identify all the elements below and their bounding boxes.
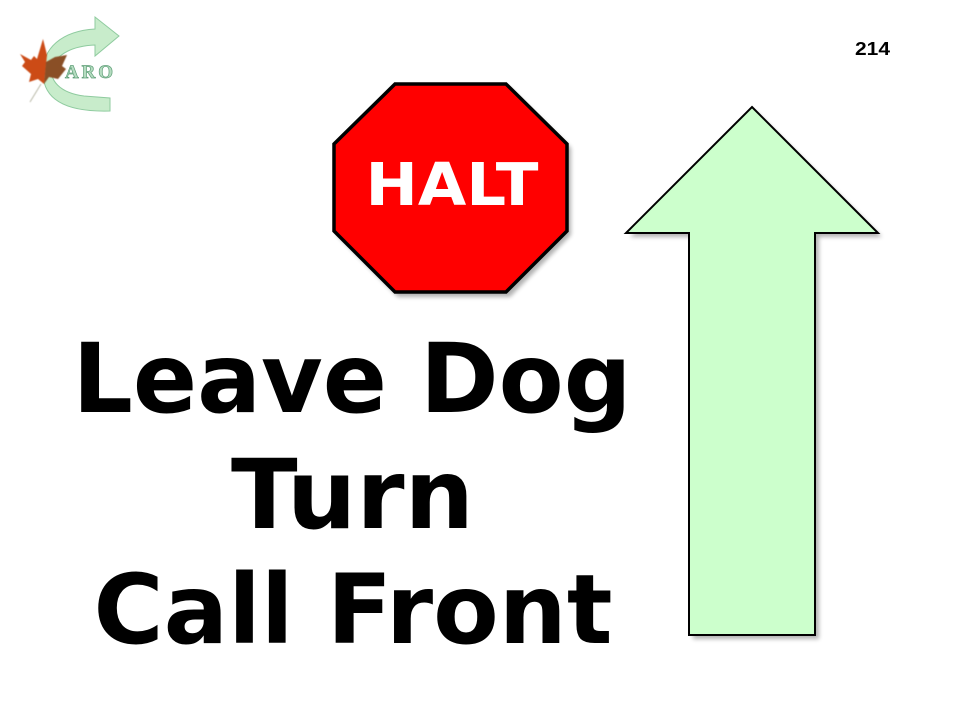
stop sign: HALT: HALT bbox=[366, 150, 538, 219]
instruction text bbox=[72, 323, 632, 666]
icon: maple leaf bbox=[20, 39, 67, 102]
page number: 214 bbox=[855, 38, 891, 59]
instruction text: Turn bbox=[231, 439, 474, 551]
instruction text: Leave Dog bbox=[72, 323, 632, 435]
instruction text: Call Front bbox=[94, 554, 612, 666]
stop sign: HALT bbox=[334, 84, 571, 297]
logo text: ARO bbox=[65, 62, 113, 83]
icon: curved green arrow bbox=[43, 17, 119, 111]
arrow: up bbox=[626, 107, 882, 639]
logo: CARO bbox=[20, 17, 119, 111]
